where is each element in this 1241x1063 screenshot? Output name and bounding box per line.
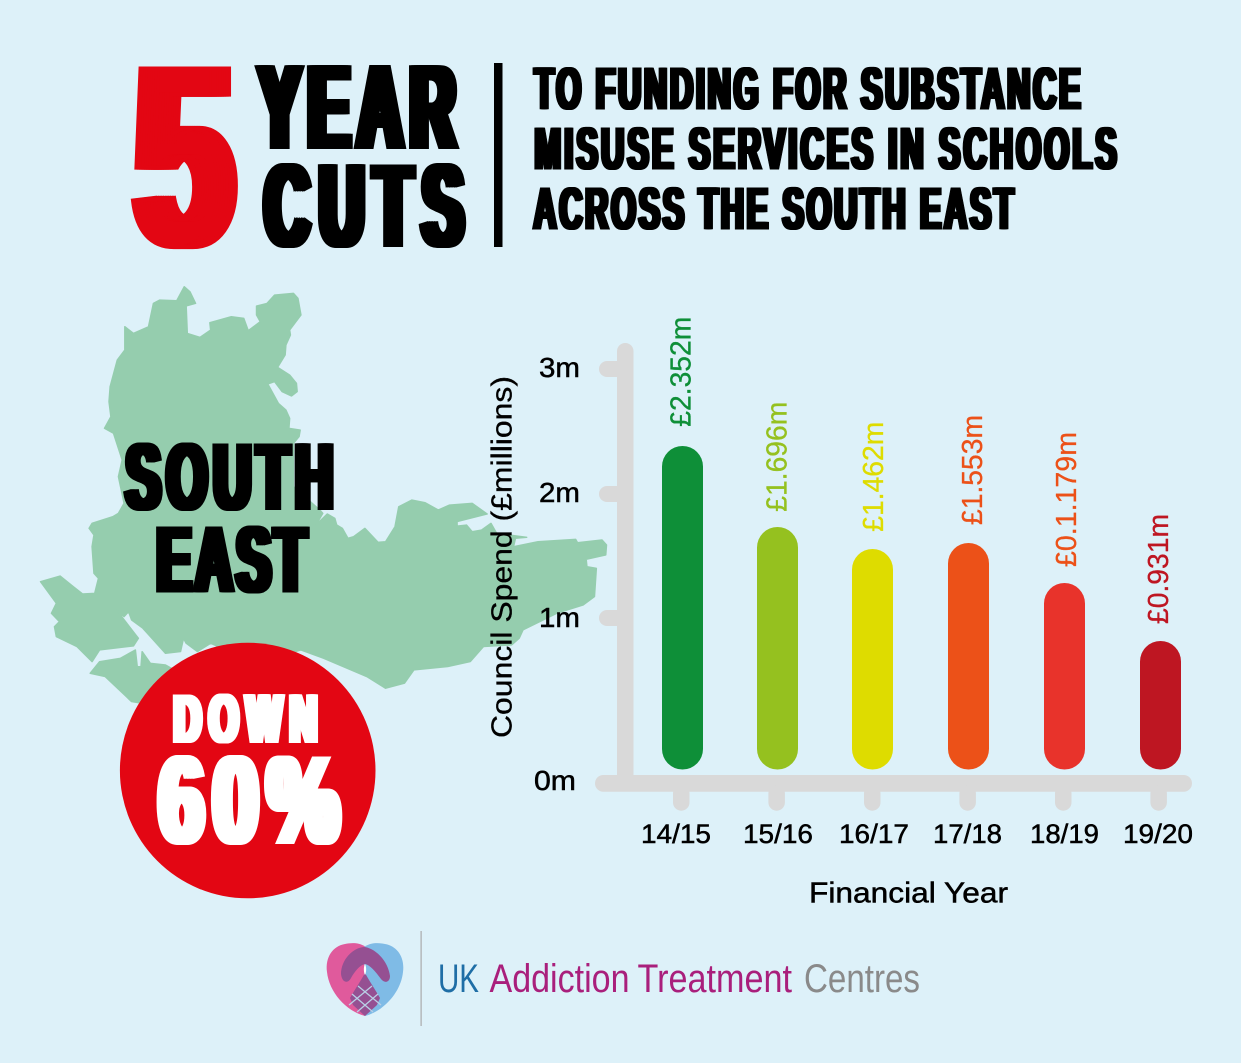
x axis labels: 17/18 bbox=[933, 819, 1002, 849]
x axis labels: 14/15 bbox=[641, 819, 711, 849]
heading: subtitle: TO FUNDING FOR SUBSTANCE bbox=[534, 57, 1080, 123]
y axis labels: 3m bbox=[539, 352, 580, 383]
y axis labels: 1m bbox=[539, 602, 580, 633]
heading: subtitle: MISUSE SERVICES IN SCHOOLS bbox=[534, 117, 1117, 183]
map label: SOUTH EAST: SOUTH bbox=[126, 425, 333, 530]
x axis labels: 18/19 bbox=[1030, 819, 1099, 849]
bar value labels bbox=[666, 317, 1175, 624]
bar chart: council spend bbox=[486, 317, 1193, 910]
logo wordmark: Treatment bbox=[638, 957, 792, 1001]
heading: YEAR CUTS: YEAR bbox=[259, 41, 455, 174]
map: South East region bbox=[41, 287, 606, 707]
y axis labels bbox=[534, 352, 580, 796]
chart axes bbox=[595, 343, 1192, 811]
heading: YEAR CUTS: CUTS bbox=[265, 141, 463, 271]
callout: down 60%: 60% bbox=[159, 732, 339, 870]
icon: heart of hands bbox=[327, 943, 403, 1016]
heading divider bbox=[494, 63, 502, 247]
logo wordmark: UK bbox=[438, 957, 479, 1001]
bar value labels: £1.696m bbox=[762, 402, 794, 512]
heading number: 5: 5 bbox=[136, 14, 232, 300]
bar value labels: £0.1.179m bbox=[1051, 432, 1083, 567]
x axis labels bbox=[641, 819, 1193, 849]
logo: UK Addiction Treatment Centres bbox=[327, 931, 920, 1026]
x axis labels: 19/20 bbox=[1123, 819, 1193, 849]
x axis title: Financial Year bbox=[809, 878, 1008, 910]
bars bbox=[662, 446, 1181, 770]
heading: subtitle bbox=[534, 57, 1117, 243]
callout: down 60%: DOWN bbox=[174, 680, 317, 757]
logo wordmark: Centres bbox=[804, 957, 920, 1001]
map label: SOUTH EAST bbox=[126, 425, 333, 611]
x axis labels: 15/16 bbox=[743, 819, 813, 849]
x axis labels: 16/17 bbox=[839, 819, 909, 849]
callout: down 60% bbox=[120, 643, 376, 898]
map label: SOUTH EAST: EAST bbox=[157, 507, 306, 611]
bar value labels: £1.553m bbox=[957, 415, 989, 525]
y axis labels: 2m bbox=[539, 477, 580, 508]
bar value labels: £1.462m bbox=[858, 422, 890, 532]
heading: YEAR CUTS bbox=[259, 41, 463, 271]
y axis title: Council Spend (£millions) bbox=[486, 376, 518, 738]
logo wordmark: Addiction bbox=[490, 957, 630, 1001]
heading: subtitle: ACROSS THE SOUTH EAST bbox=[534, 177, 1014, 243]
logo wordmark bbox=[438, 957, 920, 1001]
bar value labels: £0.931m bbox=[1143, 514, 1175, 624]
bar value labels: £2.352m bbox=[666, 317, 698, 427]
y axis labels: 0m bbox=[534, 765, 576, 796]
logo divider bbox=[420, 931, 422, 1026]
